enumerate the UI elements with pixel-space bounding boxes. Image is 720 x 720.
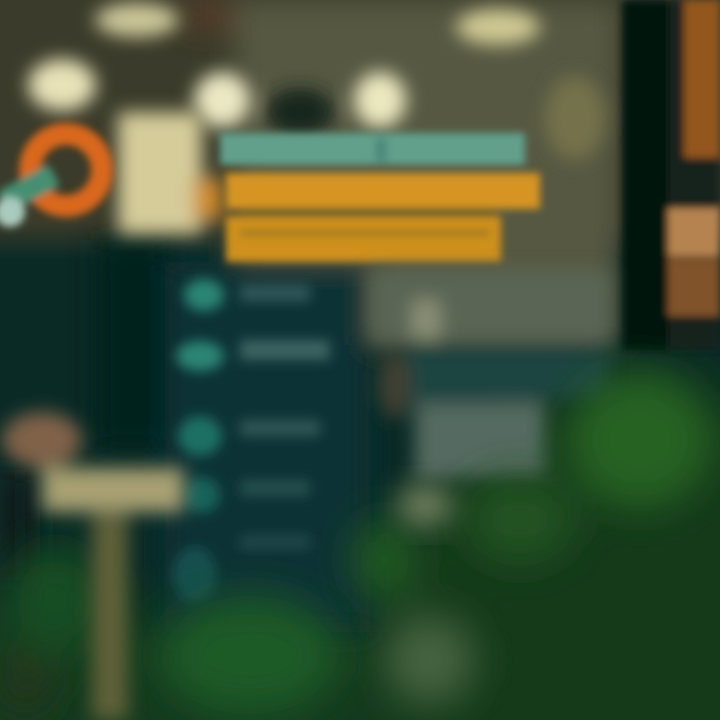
heading: orange title bars [226, 173, 540, 262]
foliage: highlight [397, 483, 453, 527]
foliage: bottom right [353, 372, 712, 705]
sign post [2, 412, 184, 720]
icon: orange ring [0, 134, 102, 227]
background wall [0, 0, 620, 632]
foliage: bottom left [0, 545, 340, 715]
heading: teal bar [220, 133, 525, 165]
right dark column and orange panels [622, 0, 720, 350]
ceiling lights [28, 3, 605, 160]
panel: list on dark teal [173, 279, 330, 603]
panel: right grey text block [370, 270, 610, 478]
cream block [118, 112, 222, 234]
